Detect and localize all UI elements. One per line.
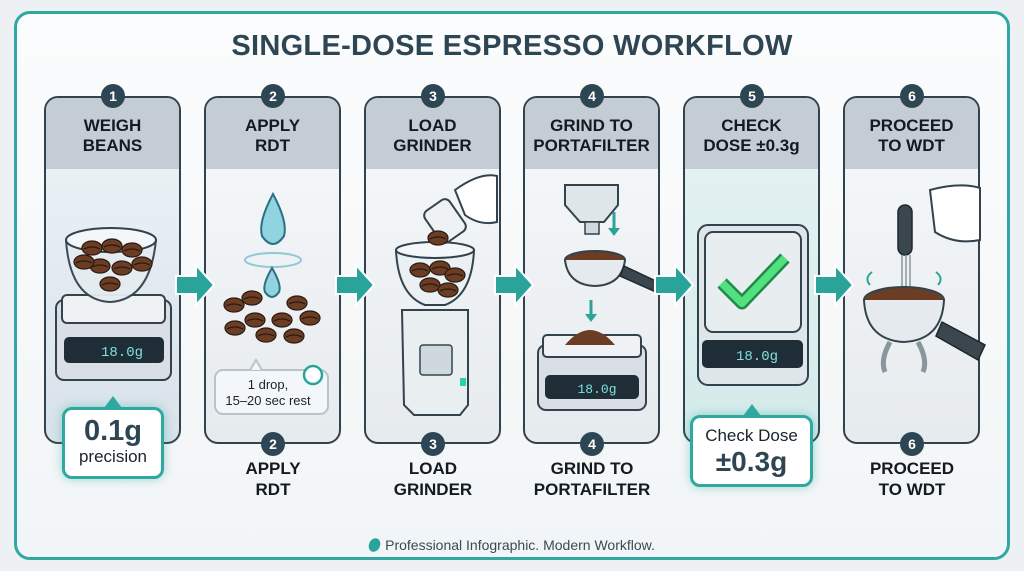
panel: step 1 weigh beans: BEANS	[83, 136, 142, 155]
text: 6	[908, 88, 916, 104]
text: 3	[429, 436, 437, 452]
text: GRIND TO	[551, 459, 633, 478]
bottom labels	[245, 459, 954, 499]
icon: scale with checkmark: 18.0g	[736, 349, 778, 365]
panel: step 5 check dose: CHECK	[721, 116, 782, 135]
text: 2	[269, 88, 277, 104]
icon: WDT tool in portafilter	[864, 185, 985, 372]
callout: 1 drop rest: 1 drop,	[248, 377, 288, 392]
panel: step 6 proceed to wdt: TO WDT	[878, 136, 945, 155]
panel: step 5 check dose: DOSE ±0.3g	[703, 136, 800, 155]
panel: step 1 weigh beans	[44, 96, 181, 444]
text: TO WDT	[879, 480, 945, 499]
callout: 1 drop rest: 15–20 sec rest	[225, 393, 311, 408]
text: 6	[908, 436, 916, 452]
panel: step 4 grind to portafilter: PORTAFILTER	[533, 136, 650, 155]
arrows between panels	[176, 265, 853, 305]
icon: scale with bowl of beans: 18.0g	[101, 345, 143, 361]
icon: scale with bowl of beans	[56, 228, 171, 380]
panel: step 3 load grinder: LOAD	[408, 116, 457, 135]
text: APPLY	[245, 459, 301, 478]
text: GRINDER	[394, 480, 472, 499]
icon: grinder with hand	[396, 175, 497, 415]
icon: scale with checkmark	[698, 225, 808, 385]
callout: 0.1g precision	[62, 407, 164, 479]
callout: 0.1g precision: 0.1g	[84, 415, 142, 447]
panel: step 4 grind to portafilter: GRIND TO	[550, 116, 633, 135]
text: 4	[588, 436, 596, 452]
text: PORTAFILTER	[534, 480, 650, 499]
panel: step 1 weigh beans: WEIGH	[84, 116, 141, 135]
text: LOAD	[409, 459, 457, 478]
text: 5	[748, 88, 756, 104]
text: PROCEED	[870, 459, 954, 478]
callout: 1 drop rest	[215, 360, 328, 414]
panel: step 4 grind to portafilter	[523, 96, 660, 444]
panel: step 3 load grinder	[364, 96, 501, 444]
panel: step 3 load grinder: GRINDER	[393, 136, 472, 155]
callout: check dose ±0.3g: ±0.3g	[716, 446, 787, 477]
number badges top	[101, 84, 924, 108]
icon: grinder spout, portafilter and scale: 18.0g	[577, 382, 617, 397]
panel: step 2 apply rdt: RDT	[255, 136, 290, 155]
title: SINGLE-DOSE ESPRESSO WORKFLOW	[231, 30, 793, 62]
callout: check dose ±0.3g	[690, 415, 813, 487]
text: 1	[109, 88, 117, 104]
panel: step 2 apply rdt: APPLY	[245, 116, 300, 135]
panel: step 6 proceed to wdt: PROCEED	[869, 116, 954, 135]
callout: check dose ±0.3g: Check Dose	[705, 426, 798, 445]
text: 3	[429, 88, 437, 104]
panel: step 2 apply rdt	[204, 96, 341, 444]
number badges bottom	[261, 432, 924, 456]
panel: step 6 proceed to wdt	[843, 96, 980, 444]
text: 4	[588, 88, 596, 104]
footer: Professional Infographic. Modern Workflow.	[385, 537, 655, 553]
text: 2	[269, 436, 277, 452]
text: RDT	[256, 480, 290, 499]
callout: 0.1g precision: precision	[79, 447, 147, 466]
icon: grinder spout, portafilter and scale	[538, 185, 660, 410]
panel: step 5 check dose	[683, 96, 820, 444]
icon: water drops and beans	[224, 194, 320, 343]
